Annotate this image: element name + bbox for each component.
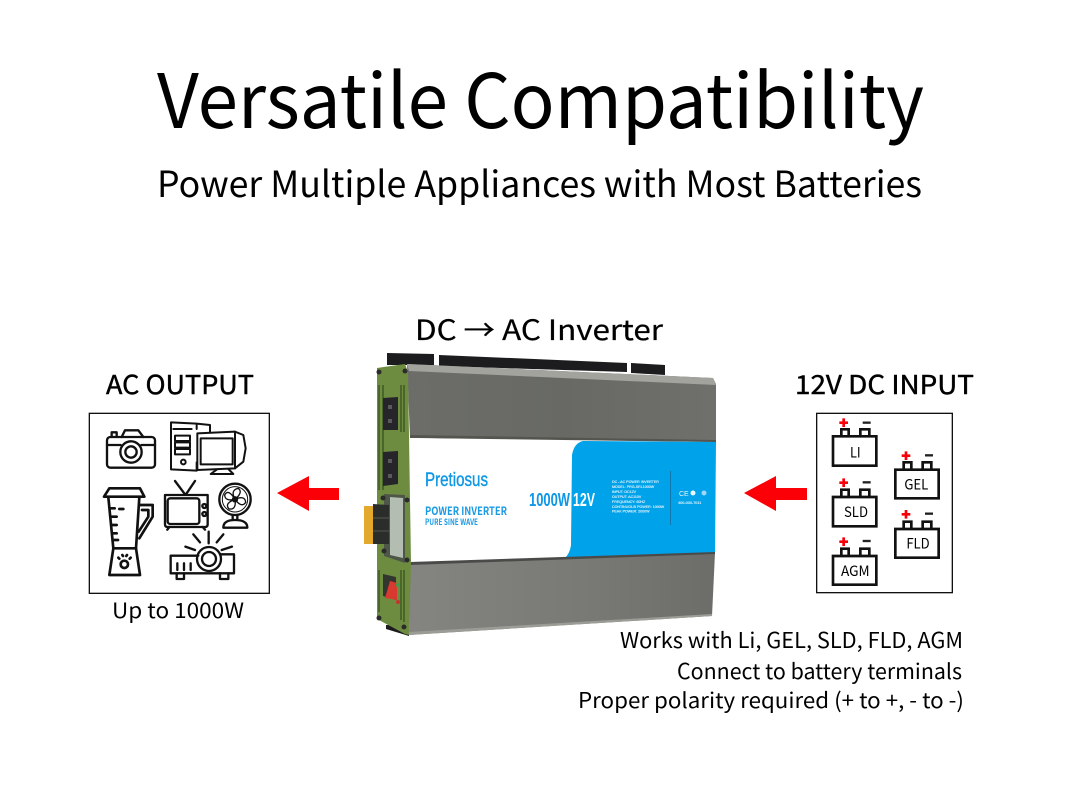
title: Versatile Compatibility (157, 41, 924, 150)
label blue (565, 441, 716, 558)
display window (384, 494, 405, 563)
label spec block: DC - AC POWER INVERTER (612, 480, 659, 484)
label spec block: MODEL: PRG-SRL1000W (612, 485, 655, 489)
AC output caption: Up to 1000W (112, 595, 244, 625)
battery notes: Proper polarity required (+ to +, - to -) (578, 684, 964, 715)
icon: television (165, 481, 208, 530)
icon: blender (104, 488, 153, 575)
label text: brand: Pretiosus (425, 470, 488, 491)
battery: GEL (895, 451, 939, 498)
label text: product: POWER INVERTER (425, 503, 507, 519)
label text: wave: PURE SINE WAVE (425, 516, 478, 528)
bottom panel (409, 553, 715, 635)
battery notes: Connect to battery terminals (677, 655, 962, 686)
icon: projector (171, 532, 234, 579)
battery: GEL: GEL (904, 474, 929, 494)
label certification: CE (679, 491, 689, 498)
panel: AC appliances (89, 413, 269, 593)
label spec block: CONTINUOUS POWER: 1000W (612, 505, 665, 509)
label spec block: INPUT: DC12V (612, 490, 637, 494)
AC output heading: AC OUTPUT (106, 365, 254, 402)
icon: desk fan (219, 484, 251, 528)
battery: SLD (833, 478, 876, 526)
inverter product illustration (364, 353, 716, 636)
AC sockets (383, 397, 398, 430)
arrow: inverter to appliances (277, 476, 339, 511)
label white (410, 438, 575, 563)
terminal block (364, 506, 373, 544)
battery: LI (833, 418, 876, 466)
power switch (383, 574, 396, 600)
battery notes (578, 624, 964, 715)
DC input heading: 12V DC INPUT (795, 365, 974, 402)
screws (376, 368, 410, 630)
panel: battery types (817, 413, 952, 593)
battery: LI: LI (850, 443, 861, 463)
battery: FLD (895, 510, 939, 558)
mounting tabs (386, 353, 665, 636)
battery: FLD: FLD (906, 534, 930, 554)
top panel (407, 364, 716, 442)
label spec block: OUTPUT: AC110V (612, 495, 642, 499)
label phone: 400-000-7011 (678, 501, 701, 505)
green side plate (377, 364, 411, 635)
inverter heading: DC → AC Inverter (415, 309, 663, 349)
battery: AGM (833, 537, 876, 585)
label spec block: FREQUENCY: 60HZ (612, 500, 646, 504)
label text: rating: 1000W (529, 490, 570, 510)
battery notes: Works with Li, GEL, SLD, FLD, AGM (620, 624, 963, 655)
label text: voltage: 12V (573, 490, 595, 510)
label spec block: PEAK POWER: 2000W (612, 510, 650, 514)
battery: SLD: SLD (844, 502, 868, 522)
battery: AGM: AGM (841, 561, 870, 581)
subtitle: Power Multiple Appliances with Most Batteries (157, 156, 922, 208)
label spec block (612, 480, 665, 514)
icon: desktop computer (171, 422, 246, 474)
icon: camera (107, 430, 155, 468)
arrow: batteries to inverter (744, 476, 807, 511)
